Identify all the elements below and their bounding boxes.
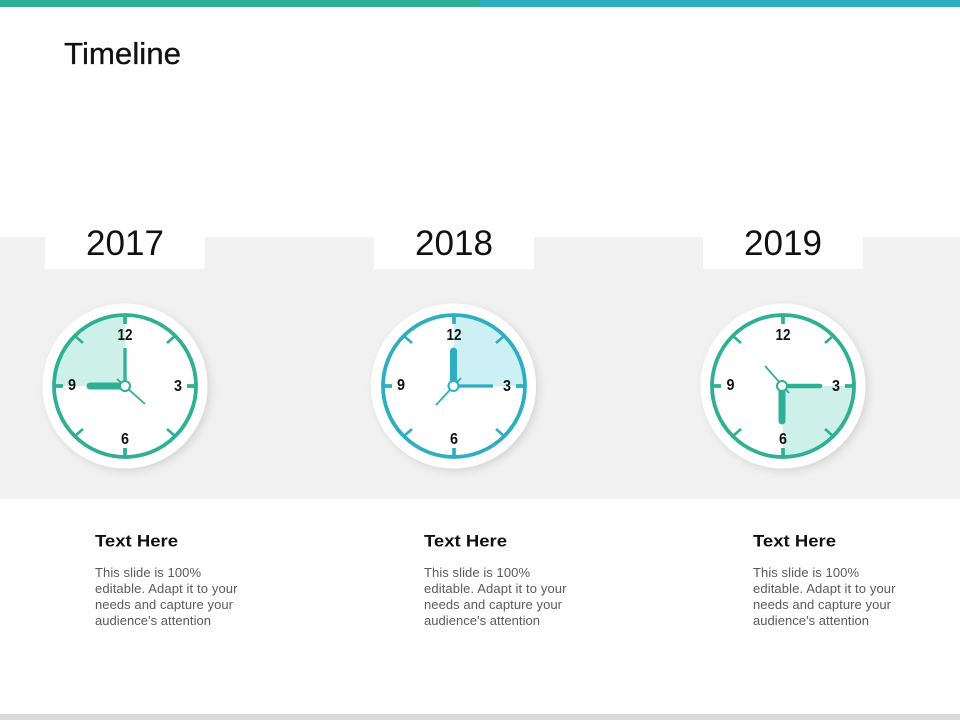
text block 2017: Text Here	[95, 532, 178, 550]
clock 2017: 9	[68, 377, 76, 394]
year tab 2019: 2019	[744, 224, 822, 263]
clock 2017: 3	[174, 378, 182, 395]
text block 2018: Text Here	[424, 532, 507, 550]
text block 2019: editable. Adapt it to your	[753, 581, 896, 596]
top bar	[0, 0, 960, 7]
grey band	[0, 237, 960, 499]
text block 2018: audience's attention	[424, 613, 540, 628]
clock 2018: 9	[397, 377, 405, 394]
clock 2017: 6	[121, 431, 129, 448]
text block 2017: editable. Adapt it to your	[95, 581, 238, 596]
year tab 2017	[45, 224, 205, 269]
text block 2019	[753, 532, 896, 628]
clock 2019: 3	[832, 378, 840, 395]
text block 2018: needs and capture your	[424, 597, 563, 612]
clock 2019: 6	[779, 431, 787, 448]
panel: 2019	[700, 224, 896, 628]
bottom bar	[0, 714, 960, 720]
text block 2018: This slide is 100%	[424, 565, 530, 580]
clock 2018: 6	[450, 431, 458, 448]
text block 2019: needs and capture your	[753, 597, 892, 612]
panel: 2018	[371, 224, 567, 628]
text block 2017: This slide is 100%	[95, 565, 201, 580]
title: Timeline	[64, 36, 181, 71]
text block 2017: needs and capture your	[95, 597, 234, 612]
clock 2018	[371, 304, 536, 468]
panel: 2017	[42, 224, 238, 628]
year tab 2019	[703, 224, 863, 269]
year tab 2018: 2018	[415, 224, 493, 263]
clock 2019: 9	[726, 377, 735, 394]
clock 2017: 12	[118, 327, 133, 344]
text block 2018: editable. Adapt it to your	[424, 581, 567, 596]
clock 2019: 12	[776, 327, 791, 344]
text block 2019: audience's attention	[753, 613, 869, 628]
clock 2018: 3	[503, 378, 511, 395]
text block 2017	[95, 532, 238, 628]
year tab 2017: 2017	[86, 224, 164, 263]
clock 2019	[700, 304, 866, 468]
text block 2017: audience's attention	[95, 613, 211, 628]
text block 2019: This slide is 100%	[753, 565, 859, 580]
clock 2017	[42, 304, 208, 468]
text block 2019: Text Here	[753, 532, 836, 550]
text block 2018	[424, 532, 567, 628]
clock 2018: 12	[446, 327, 462, 344]
year tab 2018	[374, 224, 534, 269]
